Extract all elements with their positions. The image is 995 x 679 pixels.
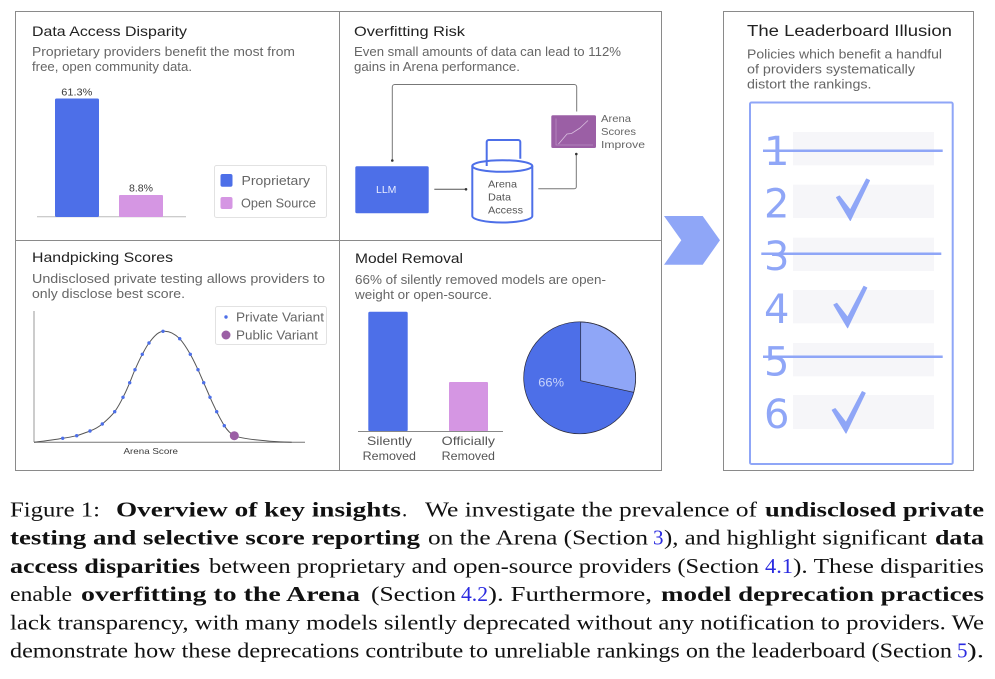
icon: database cylinder: Data	[488, 192, 511, 204]
leaderboard card: 1	[764, 129, 789, 175]
arrow: LLM to data	[434, 188, 467, 191]
caption: demonstrate how these deprecations contribute to unreliable rankings on the leaderboard (Section	[10, 639, 953, 663]
text block: leaderboard description: distort the rankings.	[747, 78, 872, 92]
panel: four-quadrant frame	[15, 11, 662, 470]
legend: private and public variant	[216, 306, 326, 344]
caption: data	[935, 526, 985, 550]
bar chart: data access: 8.8%	[129, 183, 153, 195]
caption: undisclosed private	[765, 498, 984, 522]
panel: The Leaderboard Illusion	[724, 12, 974, 470]
icon: rising score chart	[551, 115, 596, 148]
caption: model deprecation practices	[661, 582, 984, 606]
bar chart: removal counts: Silently	[367, 434, 412, 448]
bar chart: removal counts	[358, 312, 503, 463]
text block: data access description: free, open community data.	[32, 60, 192, 74]
panel: Data Access Disparity	[32, 23, 326, 218]
caption: We investigate the prevalence of	[425, 498, 757, 522]
text block: leaderboard description	[747, 48, 942, 92]
text block: model removal description	[354, 273, 606, 302]
legend: private and public variant: Private Variant	[236, 310, 325, 324]
icon: database cylinder	[472, 140, 532, 222]
legend: proprietary and open source	[214, 166, 326, 218]
text block: overfitting description: gains in Arena performance.	[354, 60, 520, 74]
caption: testing and selective score reporting	[10, 526, 421, 550]
heading: Data Access Disparity: Data Access Disparity	[32, 23, 187, 39]
caption: ). These disparities	[793, 554, 984, 578]
bar chart: data access: 61.3%	[61, 86, 92, 98]
heading: The Leaderboard Illusion: The Leaderboard Illusion	[747, 23, 952, 40]
leaderboard card	[750, 102, 953, 464]
legend: proprietary and open source: Open Source	[241, 196, 316, 210]
legend: private and public variant: Public Variant	[236, 328, 319, 342]
pie chart: 66 percent: 66%	[538, 376, 564, 390]
leaderboard card: 4	[764, 287, 789, 333]
chart: score distribution curve: Arena Score	[124, 446, 178, 456]
text block: leaderboard description: Policies which benefit a handful	[747, 48, 942, 62]
caption: overfitting to the Arena	[81, 582, 361, 606]
text block: handpicking description: only disclose best score.	[32, 287, 185, 301]
caption: enable	[10, 582, 72, 606]
caption: Overview of key insights	[116, 498, 401, 522]
caption: ).	[967, 639, 984, 663]
pie chart: 66 percent	[524, 322, 636, 434]
caption: ). Furthermore,	[488, 582, 652, 606]
bar chart: data access	[37, 86, 186, 217]
caption: on the Arena (Section	[428, 526, 649, 550]
leaderboard card: 3	[764, 234, 789, 280]
text block: overfitting description	[354, 45, 621, 74]
leaderboard card: 6	[764, 392, 789, 438]
bar chart: removal counts: Officially	[442, 434, 495, 448]
panel: Handpicking Scores	[32, 249, 326, 456]
panel: Overfitting Risk	[354, 23, 645, 222]
caption: 3	[653, 526, 664, 550]
caption	[10, 498, 985, 663]
box: LLM: LLM	[376, 184, 396, 196]
panel: Model Removal	[354, 250, 636, 463]
caption: 5	[957, 639, 968, 663]
text block: model removal description: weight or open-source.	[354, 288, 492, 302]
label: Arena Scores Improve: Arena	[601, 113, 631, 125]
heading: Model Removal: Model Removal	[355, 250, 463, 266]
text block: handpicking description: Undisclosed private testing allows providers to	[32, 272, 325, 286]
caption: ), and highlight significant	[664, 526, 927, 550]
bar chart: removal counts: Removed	[363, 449, 416, 463]
caption: 4.2	[461, 582, 488, 606]
arrow: chevron to leaderboard	[664, 216, 720, 265]
heading: Overfitting Risk: Overfitting Risk	[354, 23, 466, 39]
text block: model removal description: 66% of silently removed models are open-	[355, 273, 606, 287]
arrow: data to scores	[538, 153, 578, 189]
chart: score distribution curve	[34, 311, 305, 456]
caption: Figure 1:	[10, 498, 100, 522]
leaderboard card: 5	[764, 340, 789, 386]
caption: (Section	[371, 582, 457, 606]
heading: Handpicking Scores: Handpicking Scores	[32, 249, 173, 265]
caption: 4.1	[765, 554, 793, 578]
bar chart: removal counts: Removed	[442, 449, 495, 463]
caption: between proprietary and open-source providers (Section	[209, 554, 760, 578]
text block: data access description	[32, 45, 295, 74]
label: Arena Scores Improve	[601, 113, 645, 151]
caption: .	[402, 498, 407, 522]
text block: handpicking description	[32, 272, 325, 301]
arrow: feedback from scores to LLM	[391, 84, 577, 162]
label: Arena Scores Improve: Scores	[601, 126, 636, 138]
leaderboard card: 2	[764, 182, 789, 228]
caption: lack transparency, with many models silently deprecated without any notification to providers. We	[10, 610, 984, 634]
icon: database cylinder: Arena	[488, 178, 517, 190]
icon: database cylinder: Access	[488, 204, 523, 216]
caption: access disparities	[10, 554, 200, 578]
text block: leaderboard description: of providers systematically	[747, 63, 916, 77]
legend: proprietary and open source: Proprietary	[242, 174, 311, 188]
text block: data access description: Proprietary providers benefit the most from	[32, 45, 295, 59]
text block: overfitting description: Even small amounts of data can lead to 112%	[354, 45, 621, 59]
label: Arena Scores Improve: Improve	[601, 139, 645, 151]
box: LLM	[355, 166, 429, 213]
